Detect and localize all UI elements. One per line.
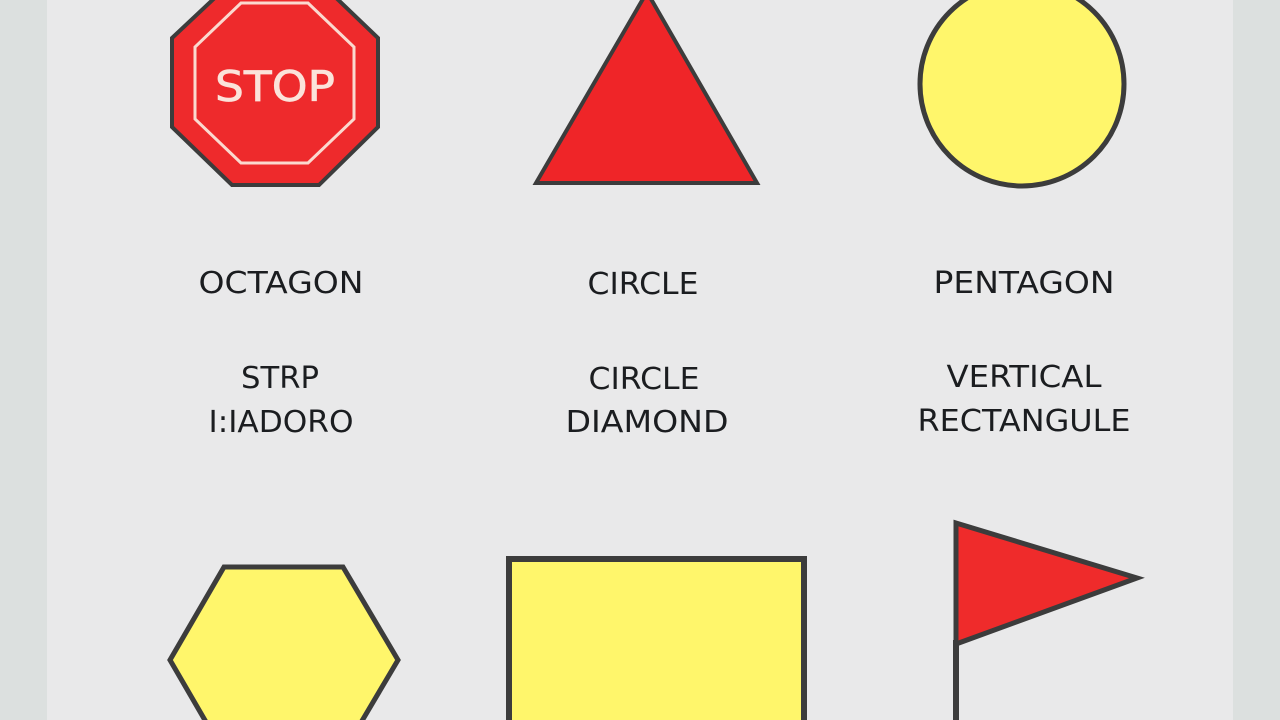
label: VERTICAL RECTANGULE: VERTICAL bbox=[946, 360, 1102, 395]
label: CIRCLE DIAMOND: CIRCLE bbox=[588, 362, 700, 397]
label: STRP HADORO bbox=[208, 361, 354, 440]
label: PENTAGON: PENTAGON bbox=[934, 266, 1114, 301]
icon: yellow hexagon bbox=[170, 567, 398, 720]
icon: yellow circle bbox=[920, 0, 1124, 186]
label: STRP HADORO: I:IADORO bbox=[208, 405, 354, 440]
label: VERTICAL RECTANGULE: RECTANGULE bbox=[918, 404, 1130, 439]
label: VERTICAL RECTANGULE bbox=[918, 360, 1130, 439]
label: OCTAGON: OCTAGON bbox=[198, 266, 364, 301]
label: CIRCLE DIAMOND bbox=[566, 362, 728, 440]
icon: red triangle bbox=[536, 0, 757, 183]
icon: stop sign octagon bbox=[172, 0, 378, 185]
label: STRP HADORO: STRP bbox=[241, 361, 319, 396]
label: CIRCLE DIAMOND: DIAMOND bbox=[566, 405, 728, 440]
icon: yellow rectangle bbox=[509, 559, 804, 720]
icon: red pennant flag bbox=[956, 523, 1137, 720]
label: CIRCLE: CIRCLE bbox=[588, 267, 698, 302]
sign text: STOP: STOP bbox=[215, 62, 335, 111]
